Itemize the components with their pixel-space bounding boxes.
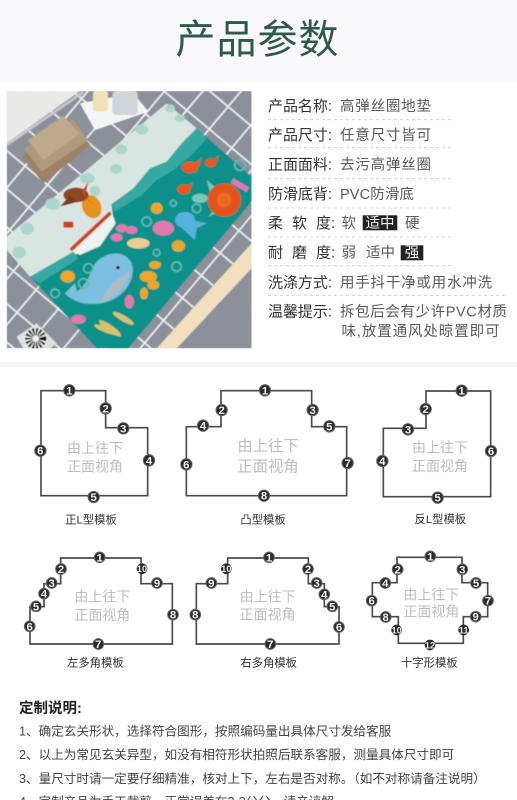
diagram: convex template: 2 xyxy=(219,405,225,417)
spec: tip line two: 味,放置通风处晾置即可 xyxy=(342,323,500,340)
diagram: convex template: 凸型模板 xyxy=(240,512,286,526)
light clouds xyxy=(13,104,185,258)
spec: tip: 拆包后会有少许PVC材质 xyxy=(340,304,507,321)
diagram: front L template: 正L型模板 xyxy=(65,512,117,526)
diagram: reverse L template: 正面视角 xyxy=(412,458,468,474)
turtle xyxy=(192,180,241,217)
diagram: right multi-corner template: 3 xyxy=(314,578,320,590)
diagram: front L template: 4 xyxy=(146,455,153,467)
diagram: cross template: 6 xyxy=(369,596,375,608)
diagram: left multi-corner template: 8 xyxy=(170,610,176,622)
diagram: front L template: 2 xyxy=(103,403,109,415)
diagram: cross template: 3 xyxy=(459,564,465,576)
diagram: left multi-corner template: 1 xyxy=(97,552,103,564)
orange fish xyxy=(177,155,219,194)
diagram: reverse L template: 反L型模板 xyxy=(415,512,466,526)
diagram: convex template: 5 xyxy=(326,421,332,433)
diagram: convex template: 4 xyxy=(200,421,207,433)
diagram: front L template xyxy=(35,385,155,526)
diagram: convex template: 6 xyxy=(183,459,189,471)
diagram: front L template: 1 xyxy=(66,385,72,397)
diagram: left multi-corner template: 左多角模板 xyxy=(67,655,124,669)
spec: durability xyxy=(268,244,423,261)
template diagrams row two xyxy=(24,551,493,669)
spec: softness: 柔 xyxy=(268,215,283,232)
spec: durability: 弱 xyxy=(342,245,356,261)
spec: size: 产品尺寸: xyxy=(268,127,332,144)
template diagrams row one xyxy=(35,385,497,526)
diagram: reverse L template: 4 xyxy=(379,456,386,468)
spec: backing: 防滑底背: xyxy=(268,186,332,203)
diagram: left multi-corner template: 5 xyxy=(33,601,39,613)
diagram: reverse L template: 5 xyxy=(435,493,441,505)
spec: face material xyxy=(268,156,431,174)
diagram: reverse L template: 2 xyxy=(423,404,429,416)
boat xyxy=(63,212,116,255)
header band xyxy=(0,0,517,83)
pink fish xyxy=(71,178,249,324)
diagram: convex template: 8 xyxy=(261,491,267,503)
photo: bath mat with sea animals xyxy=(6,91,252,348)
spec: softness: 硬 xyxy=(405,216,420,232)
spec: backing xyxy=(268,186,414,203)
diagram: right multi-corner template: 右多角模板 xyxy=(240,655,297,669)
diagram: front L template: 3 xyxy=(120,423,126,435)
diagram: right multi-corner template: 5 xyxy=(329,601,335,613)
diagram: cross template: 8 xyxy=(383,612,389,624)
diagram: convex template: 7 xyxy=(345,458,351,470)
diagram: right multi-corner template: 正面视角 xyxy=(240,607,296,623)
spec: tip xyxy=(268,304,507,321)
note 3: 3、量尺寸时请一定要仔细精准，核对上下，左右是否对称。（如不对称请备注说明） xyxy=(19,771,486,786)
diagram: cross template: 5 xyxy=(473,578,479,590)
diagram: cross template xyxy=(366,551,493,669)
diagram: right multi-corner template xyxy=(190,552,344,669)
spec: backing: PVC防滑底 xyxy=(340,186,414,203)
spec: durability: 强 xyxy=(405,245,419,261)
diagram: reverse L template: 3 xyxy=(405,424,411,436)
notes heading: 定制说明: xyxy=(19,699,82,717)
spec: name: 高弹丝圈地垫 xyxy=(340,98,432,115)
diagram: reverse L template: 由上往下 xyxy=(412,440,468,456)
spec: softness: 度: xyxy=(316,215,335,232)
spec: durability: 适中 xyxy=(366,244,395,261)
diagram: front L template: 5 xyxy=(91,492,97,504)
spec: washing xyxy=(268,274,492,291)
diagram: right multi-corner template: 8 xyxy=(192,610,198,622)
yellow fish and corals xyxy=(60,203,185,339)
diagram: cross template: 7 xyxy=(485,596,491,608)
diagram: front L template: 6 xyxy=(37,446,43,458)
diagram: cross template: 9 xyxy=(473,612,479,624)
diagram: right multi-corner template: 7 xyxy=(267,639,273,651)
spec: washing: 洗涤方式: xyxy=(268,274,332,291)
diagram: cross template: 由上往下 xyxy=(403,587,459,603)
diagram: right multi-corner template: 6 xyxy=(336,622,342,634)
spec: softness: 软 xyxy=(292,215,307,232)
diagram: cross template: 10 xyxy=(391,625,402,635)
diagram: left multi-corner template: 由上往下 xyxy=(74,588,130,604)
diagram: right multi-corner template: 2 xyxy=(305,564,311,576)
diagram: cross template: 2 xyxy=(395,564,401,576)
diagram: front L template: 正面视角 xyxy=(67,458,123,474)
diagram: left multi-corner template xyxy=(24,552,178,669)
diagram: front L template: 由上往下 xyxy=(67,440,123,456)
spec: durability: 磨 xyxy=(292,244,307,261)
diagram: convex template: 由上往下 xyxy=(237,438,299,455)
drain xyxy=(17,323,57,350)
diagram: left multi-corner template: 9 xyxy=(154,578,160,590)
mat: white top part xyxy=(7,103,197,277)
diagram: left multi-corner template: 2 xyxy=(58,564,64,576)
diagram: convex template: 正面视角 xyxy=(237,458,299,475)
diagram: cross template: 11 xyxy=(459,625,469,635)
whale xyxy=(65,253,133,304)
title: 产品参数 xyxy=(176,18,340,62)
diagram: left multi-corner template: 3 xyxy=(49,578,55,590)
panel: product specifications xyxy=(268,98,507,340)
spec: tip: 温馨提示: xyxy=(268,304,332,321)
diagram: cross template: 12 xyxy=(425,640,435,650)
spec: size xyxy=(268,126,431,144)
spec: name: 产品名称: xyxy=(268,98,332,115)
spec: softness: 适中 xyxy=(366,215,394,232)
diagram: right multi-corner template: 9 xyxy=(208,578,214,590)
mat: teal sea xyxy=(30,128,252,348)
note 2: 2、以上为常见玄关异型，如没有相符形状拍照后联系客服，测量具体尺寸即可 xyxy=(19,747,454,762)
diagram: right multi-corner template: 1 xyxy=(266,552,272,564)
spec: face material: 正面面料: xyxy=(268,156,332,174)
diagram: reverse L template: 1 xyxy=(459,386,465,398)
diagram: cross template: 十字形模板 xyxy=(401,655,458,669)
diagram: cross template: 4 xyxy=(382,578,389,590)
diagram: convex template: 1 xyxy=(262,385,268,397)
spec: durability: 度: xyxy=(316,244,335,261)
diagram: reverse L template xyxy=(377,385,497,526)
spec: face material: 去污高弹丝圈 xyxy=(340,156,431,174)
diagram: right multi-corner template: 4 xyxy=(321,589,328,601)
spec: durability: 耐 xyxy=(268,244,283,261)
spec: softness xyxy=(268,215,420,232)
spec: size: 任意尺寸皆可 xyxy=(340,126,431,144)
diagram: left multi-corner template: 10 xyxy=(137,564,147,574)
diagram: cross template: 1 xyxy=(427,551,433,563)
diagram: convex template xyxy=(181,385,353,526)
pelican xyxy=(60,182,102,219)
diagram: convex template: 3 xyxy=(310,405,316,417)
octopus xyxy=(175,212,207,240)
spec: name xyxy=(268,98,432,115)
diagram: left multi-corner template: 4 xyxy=(41,589,48,601)
diagram: left multi-corner template: 6 xyxy=(27,621,33,633)
tray with candle and glass xyxy=(80,91,148,130)
spec: washing: 用手抖干净或用水冲洗 xyxy=(340,274,492,291)
diagram: cross template: 正面视角 xyxy=(403,604,459,620)
panel: customization notes xyxy=(19,699,486,800)
spec: softness: 软 xyxy=(342,215,356,232)
diagram: right multi-corner template: 10 xyxy=(221,564,232,574)
diagram: right multi-corner template: 由上往下 xyxy=(240,588,296,604)
towels xyxy=(22,116,91,183)
diagram: left multi-corner template: 正面视角 xyxy=(74,607,130,623)
diagram: left multi-corner template: 7 xyxy=(95,639,101,651)
note 1: 1、确定玄关形状，选择符合图形，按照编码量出具体尺寸发给客服 xyxy=(19,724,392,738)
diagram: reverse L template: 6 xyxy=(488,446,494,458)
bubbles xyxy=(51,160,245,298)
